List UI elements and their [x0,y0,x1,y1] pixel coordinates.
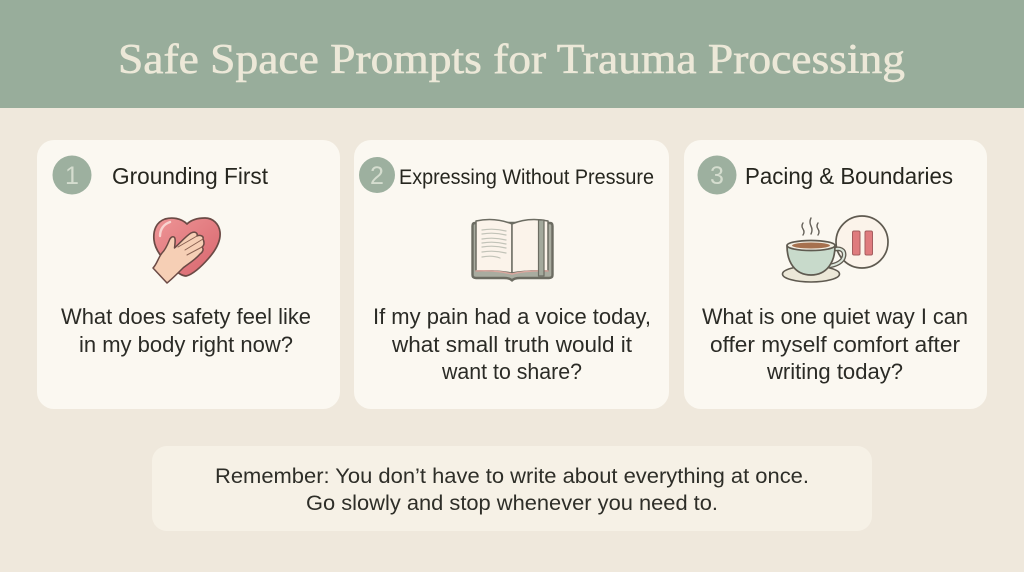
heading: grounding first: Grounding First [112,163,269,189]
panel: expressing without pressure [354,140,669,409]
heading: expressing without pressure: Expressing Without Pressure [399,166,654,189]
step number 1: 1 [65,162,79,190]
callout: reminder: Remember: You don’t have to write about everything at once. [215,465,809,488]
prompt text 3: writing today? [766,359,903,384]
panel: pacing and boundaries [684,140,987,409]
icon: tea cup and pause [782,216,888,282]
callout: reminder: Go slowly and stop whenever you need to. [306,492,718,515]
heading: pacing and boundaries: Pacing & Boundaries [745,163,953,189]
prompt text 3: What is one quiet way I can [702,304,968,329]
prompt text 1: in my body right now? [79,332,293,357]
title: Safe Space Prompts for Trauma Processing [118,37,905,83]
callout: reminder [152,446,872,531]
panel: grounding first [37,140,340,409]
prompt text 1: What does safety feel like [61,304,311,329]
prompt text 3: offer myself comfort after [710,332,960,357]
step number 3 [698,156,736,194]
step number 2: 2 [370,162,384,190]
prompt text 2: what small truth would it [391,332,632,357]
icon: hand on heart [153,218,220,283]
step number 1 [52,156,92,194]
prompt text 2: want to share? [441,359,582,384]
step number 3: 3 [710,162,724,190]
prompt text 2: If my pain had a voice today, [373,304,651,329]
header band [0,0,1024,108]
icon: open book [472,220,552,280]
step number 2 [359,157,395,193]
